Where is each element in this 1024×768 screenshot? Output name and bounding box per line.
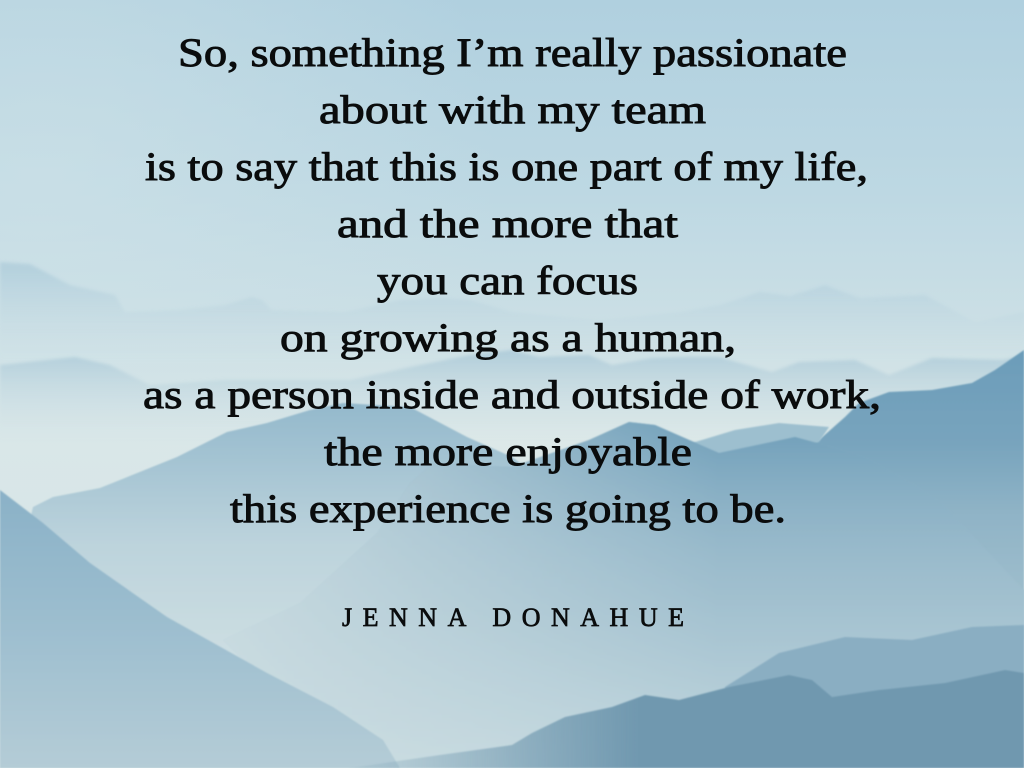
distant mountain range bbox=[0, 262, 1024, 400]
quote line 1: So, something I’m really passionate bbox=[178, 30, 847, 75]
front hill bbox=[350, 670, 1024, 768]
central mountain peak bbox=[30, 403, 640, 730]
left foreground mountain bbox=[0, 490, 400, 768]
lower broad slope bbox=[223, 422, 1024, 768]
second mountain range bbox=[0, 350, 1024, 480]
quote line 9: this experience is going to be. bbox=[230, 486, 786, 531]
quote line 2: about with my team bbox=[319, 87, 706, 132]
author name: JENNA DONAHUE bbox=[342, 603, 684, 632]
quote line 5: you can focus bbox=[377, 258, 638, 303]
quote line 3: is to say that this is one part of my life, bbox=[145, 144, 868, 189]
quote line 7: as a person inside and outside of work, bbox=[143, 372, 881, 417]
lower right foreground hills bbox=[350, 625, 1024, 768]
light mid ridge bbox=[692, 423, 829, 470]
quote text bbox=[143, 30, 881, 531]
quote line 8: the more enjoyable bbox=[324, 429, 692, 474]
quote line 6: on growing as a human, bbox=[280, 315, 736, 360]
back hill bbox=[725, 625, 1024, 768]
quote line 4: and the more that bbox=[337, 201, 678, 246]
upper right mountain bbox=[802, 350, 1024, 640]
